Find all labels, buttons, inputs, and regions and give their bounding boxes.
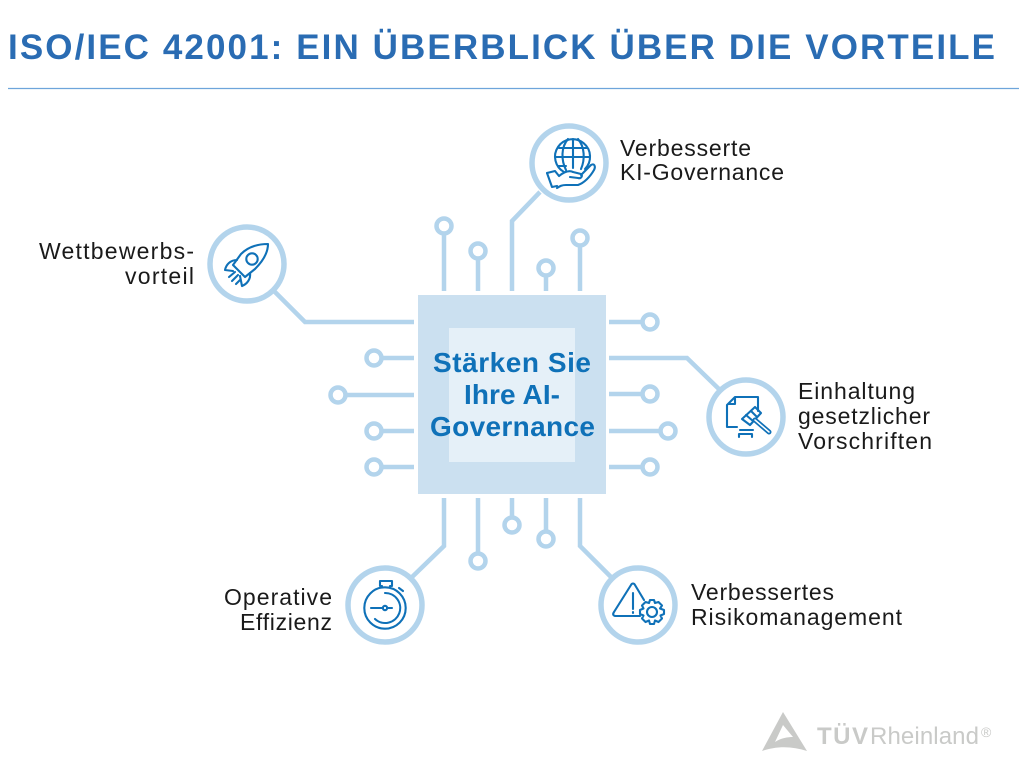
icon: document and gavel	[727, 397, 769, 437]
benefit: Wettbewerbsvorteil: vorteil	[125, 263, 194, 289]
benefit: Operative Effizienz: Operative	[224, 584, 332, 610]
benefit: Wettbewerbsvorteil	[39, 227, 284, 301]
central chip: Governance	[430, 411, 595, 442]
central chip	[418, 295, 606, 494]
benefit: Operative Effizienz	[224, 568, 422, 642]
central chip: Stärken Sie	[433, 347, 591, 378]
benefit: Einhaltung gesetzlicher Vorschriften	[709, 378, 932, 454]
benefit: Verbessertes Risikomanagement: Verbessertes	[691, 579, 834, 605]
logo: TÜV Rheinland	[762, 712, 992, 751]
logo: TÜV Rheinland: TÜV	[817, 723, 868, 750]
benefit: Verbesserte KI-Governance: Verbesserte	[620, 135, 751, 161]
benefit: Verbessertes Risikomanagement: Risikomanagement	[691, 604, 903, 630]
central chip: Ihre AI-	[464, 379, 560, 410]
title: ISO/IEC 42001: EIN ÜBERBLICK ÜBER DIE VORTEILE	[8, 28, 995, 67]
benefit: Einhaltung gesetzlicher Vorschriften: Vorschriften	[798, 428, 932, 454]
benefit: Einhaltung gesetzlicher Vorschriften: gesetzlicher	[798, 403, 930, 429]
logo: TÜV Rheinland: ®	[981, 724, 992, 740]
benefit: Einhaltung gesetzlicher Vorschriften: Einhaltung	[798, 378, 915, 404]
benefit: Operative Effizienz: Effizienz	[240, 609, 332, 635]
icon: warning triangle and gear	[613, 584, 664, 624]
icon: stopwatch	[364, 581, 406, 629]
benefit: Wettbewerbsvorteil: Wettbewerbs-	[39, 238, 194, 264]
circuit traces	[272, 192, 722, 580]
logo: TÜV Rheinland: Rheinland	[870, 723, 979, 750]
benefit: Verbesserte KI-Governance	[532, 126, 784, 200]
benefit: Verbessertes Risikomanagement	[601, 568, 903, 642]
icon: globe in hand	[547, 139, 595, 188]
icon: rocket	[225, 244, 268, 286]
benefit: Verbesserte KI-Governance: KI-Governance	[620, 159, 784, 185]
